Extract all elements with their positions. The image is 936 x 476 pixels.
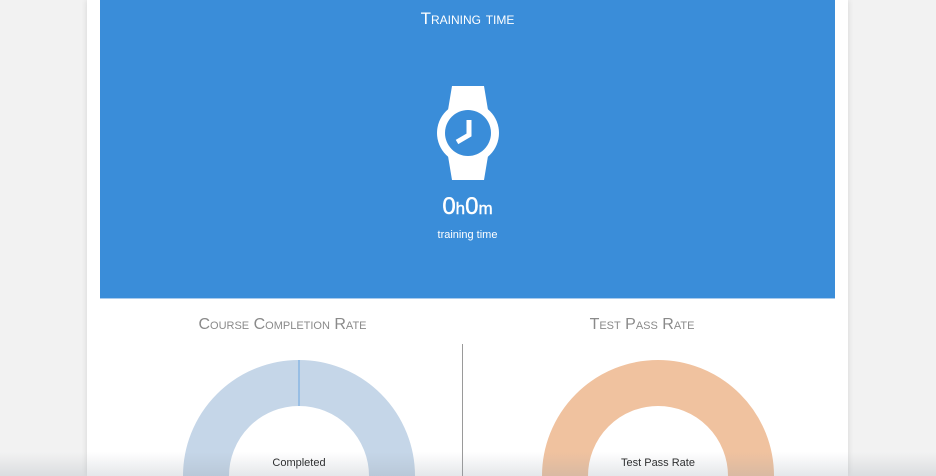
panel: training time	[100, 0, 835, 299]
divider	[462, 344, 463, 476]
chart: test pass donut	[542, 360, 774, 476]
value: 0h 0m: 0h0m	[442, 193, 493, 220]
icon: watch	[437, 86, 499, 180]
heading: course completion rate: Course Completion Rate	[198, 316, 367, 333]
label: test pass rate: Test Pass Rate	[621, 457, 695, 469]
label: training time: training time	[438, 229, 497, 241]
bottom fade	[0, 452, 936, 476]
label: completed: Completed	[272, 457, 326, 469]
chart: course completion donut	[183, 360, 415, 476]
heading: training time: Training time	[421, 9, 514, 28]
heading: test pass rate: Test Pass Rate	[590, 316, 694, 333]
